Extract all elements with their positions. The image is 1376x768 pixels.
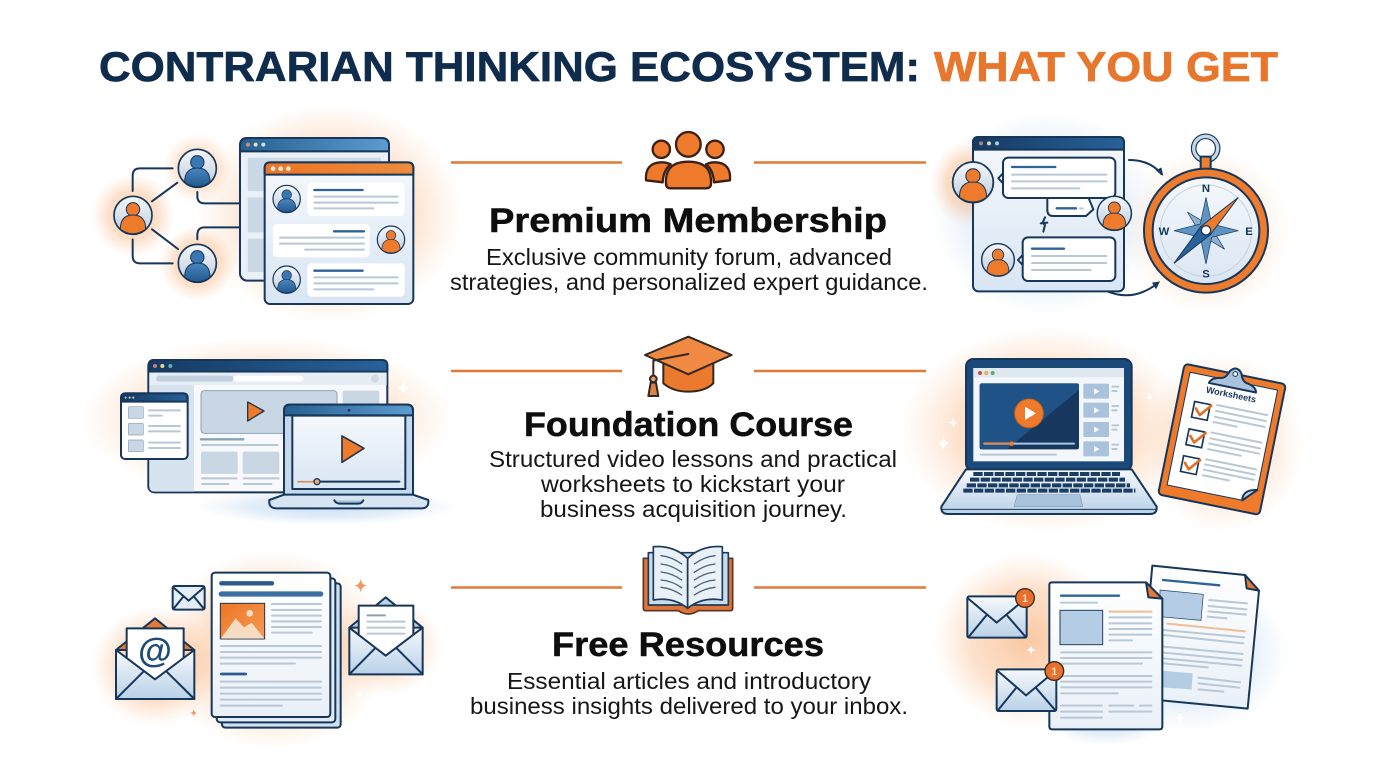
heading: Premium Membership xyxy=(489,202,887,240)
left envelope with @ xyxy=(116,618,194,699)
front browser window with chat messages xyxy=(265,162,413,304)
second envelope with notification badge: 1 xyxy=(1051,666,1057,678)
clipboard with worksheets: Worksheets xyxy=(1205,385,1257,405)
panel: Free Resources xyxy=(451,546,926,719)
illustration: chat window and compass xyxy=(930,110,1290,317)
envelope with notification badge: 1 xyxy=(1022,593,1028,605)
illustration: laptop and worksheets clipboard xyxy=(900,327,1303,533)
person nodes xyxy=(114,149,216,282)
description: strategies, and personalized expert guidance. xyxy=(450,269,928,295)
front document xyxy=(1049,582,1162,729)
description xyxy=(450,244,928,295)
icon: graduation cap xyxy=(645,337,732,396)
icon: people group xyxy=(646,132,730,188)
description: Essential articles and introductory xyxy=(507,668,871,694)
compass: E xyxy=(1245,226,1253,238)
course laptop xyxy=(941,359,1157,514)
compass: S xyxy=(1202,269,1210,281)
back document xyxy=(1140,566,1259,709)
chat window xyxy=(953,137,1131,291)
divider lines xyxy=(451,370,926,372)
illustration: community network and forum windows xyxy=(91,103,463,323)
description: Structured video lessons and practical xyxy=(489,446,897,472)
lesson list window xyxy=(121,393,188,459)
article pages xyxy=(212,573,341,728)
illustration: notified envelopes and documents xyxy=(933,553,1290,747)
icon: open book xyxy=(643,546,733,614)
sparkles xyxy=(128,381,410,483)
divider lines xyxy=(451,161,926,164)
panel: Premium Membership xyxy=(450,132,928,295)
description xyxy=(489,446,897,522)
small envelope xyxy=(173,586,205,610)
back browser window xyxy=(240,138,389,281)
description: business insights delivered to your inbox. xyxy=(470,693,908,719)
description: Exclusive community forum, advanced xyxy=(486,244,892,270)
main course window xyxy=(148,360,387,492)
title xyxy=(99,43,1278,90)
description xyxy=(470,668,908,719)
title: WHAT YOU GET xyxy=(934,43,1278,90)
second envelope with notification badge xyxy=(997,662,1064,711)
compass: N xyxy=(1202,183,1210,195)
divider lines xyxy=(451,586,926,589)
arrows to compass xyxy=(1108,160,1163,295)
compass: W xyxy=(1159,226,1170,238)
description: worksheets to kickstart your xyxy=(540,471,845,497)
envelope with notification badge xyxy=(967,589,1034,638)
network connectors xyxy=(133,168,259,263)
right envelope with letter xyxy=(349,597,423,674)
clipboard with worksheets xyxy=(1158,358,1287,515)
description: business acquisition journey. xyxy=(540,496,847,522)
panel: Foundation Course xyxy=(451,337,926,522)
heading: Free Resources xyxy=(552,626,824,664)
illustration: newsletter envelopes and article xyxy=(92,550,443,750)
compass xyxy=(1144,136,1268,293)
sparkles xyxy=(190,578,367,717)
laptop with video player xyxy=(269,405,428,508)
title: CONTRARIAN THINKING ECOSYSTEM: xyxy=(99,43,920,90)
sparkles xyxy=(1026,562,1186,723)
sparkles xyxy=(937,393,1153,451)
illustration: course web page and laptop xyxy=(80,337,460,525)
heading: Foundation Course xyxy=(524,406,853,444)
left envelope with @: @ xyxy=(138,632,172,670)
